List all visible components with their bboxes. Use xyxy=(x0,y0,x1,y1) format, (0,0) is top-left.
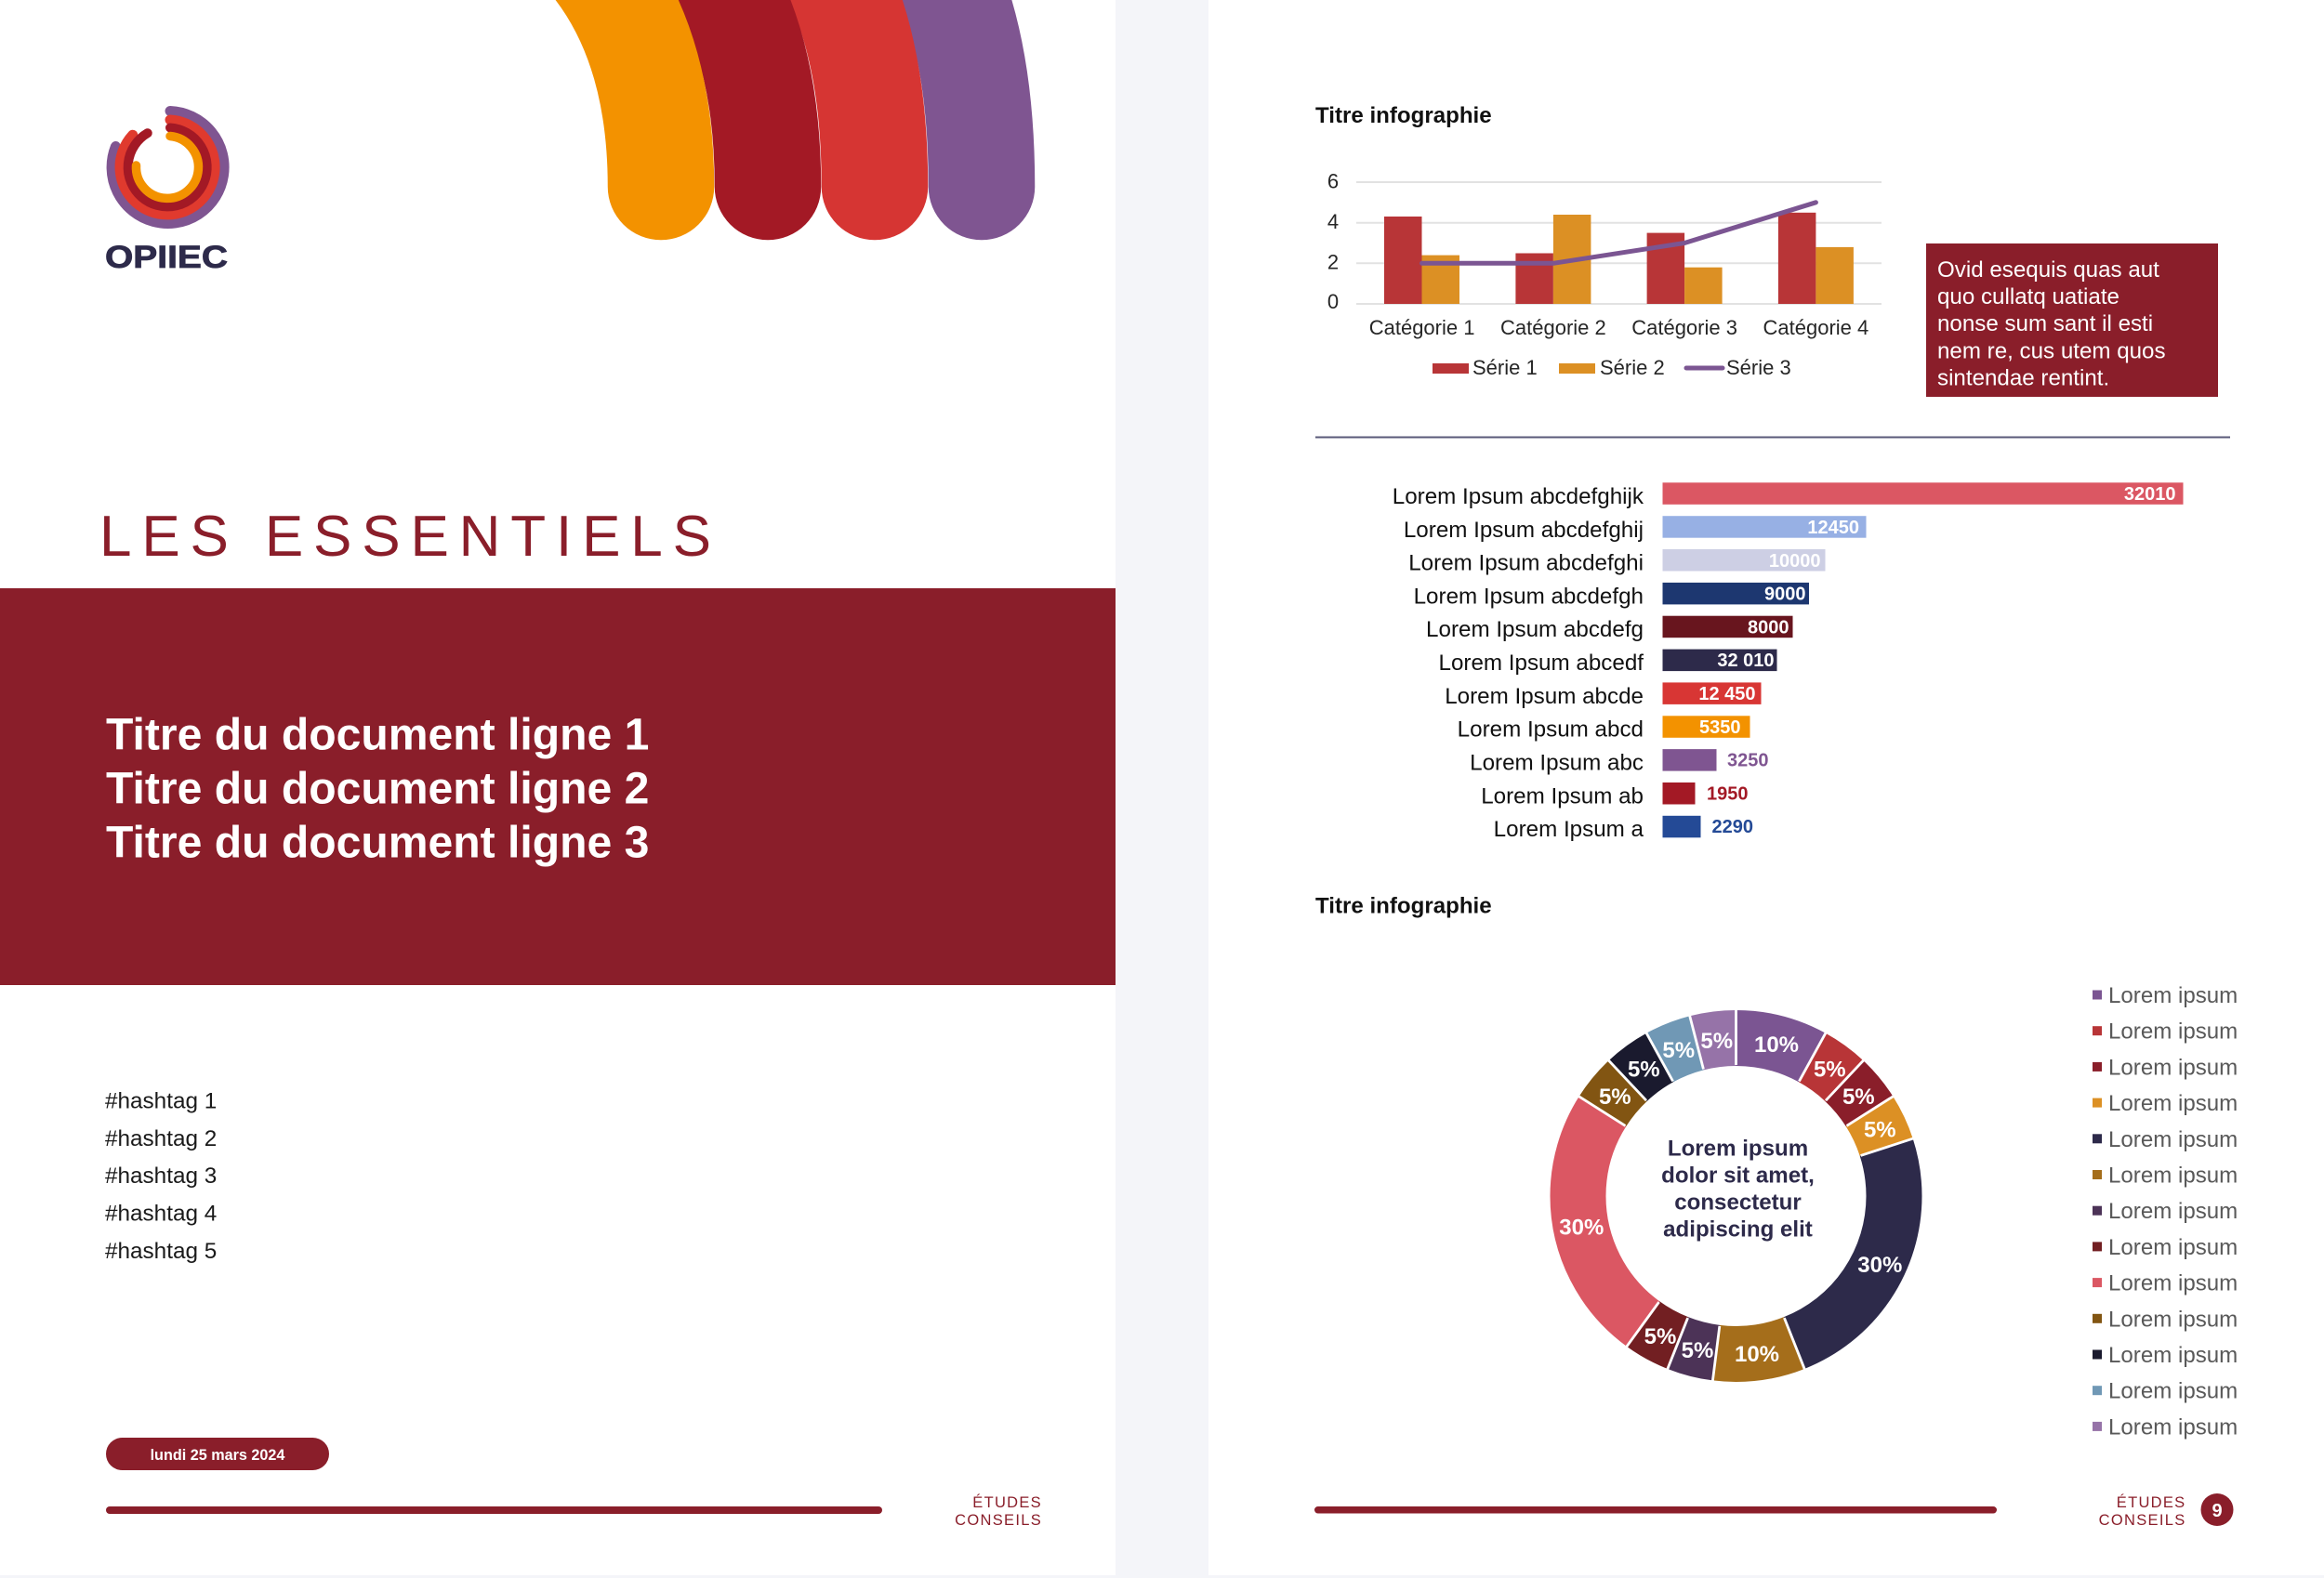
horizontal bar chart: 12 450 xyxy=(1698,684,1755,704)
combo chart: Catégorie 4 xyxy=(1763,316,1868,339)
combo chart: Catégorie 2 xyxy=(1500,316,1606,339)
donut legend: Lorem ipsum xyxy=(2108,1235,2238,1260)
page number badge xyxy=(2201,1493,2233,1526)
right footer label: CONSEILS xyxy=(2099,1512,2186,1529)
donut legend: Lorem ipsum xyxy=(2108,1127,2238,1152)
date pill xyxy=(106,1438,329,1470)
donut chart: 5% xyxy=(1644,1324,1676,1349)
combo chart: Catégorie 1 xyxy=(1369,316,1474,339)
horizontal bar chart: 2290 xyxy=(1712,817,1753,837)
horizontal bar chart: 12450 xyxy=(1807,518,1859,538)
horizontal bar chart: Lorem Ipsum abcdefg xyxy=(1426,617,1644,642)
hashtags list: #hashtag 5 xyxy=(105,1239,217,1264)
right footer rule xyxy=(1314,1506,1997,1513)
donut chart: 10% xyxy=(1735,1342,1779,1367)
donut chart: 5% xyxy=(1662,1038,1695,1063)
donut legend: Lorem ipsum xyxy=(2108,1343,2238,1368)
hashtags list xyxy=(105,1089,217,1264)
donut chart: 5% xyxy=(1599,1085,1631,1110)
horizontal bar chart xyxy=(1393,482,2183,842)
donut legend: Lorem ipsum xyxy=(2108,1019,2238,1045)
right footer label xyxy=(2099,1493,2186,1529)
combo chart: 6 xyxy=(1327,169,1339,193)
horizontal bar chart: 9000 xyxy=(1764,584,1805,604)
horizontal bar chart: Lorem Ipsum abcde xyxy=(1445,684,1644,709)
page number badge: 9 xyxy=(2212,1501,2223,1521)
right footer label: ÉTUDES xyxy=(2117,1493,2186,1511)
callout box: sintendae rentint. xyxy=(1937,366,2109,390)
donut legend: Lorem ipsum xyxy=(2108,1055,2238,1080)
left footer rule xyxy=(106,1506,882,1514)
decorative rainbow arcs xyxy=(594,0,982,187)
donut legend: Lorem ipsum xyxy=(2108,1199,2238,1224)
donut legend: Lorem ipsum xyxy=(2108,1271,2238,1296)
donut legend: Lorem ipsum xyxy=(2108,1414,2238,1440)
donut chart: 5% xyxy=(1864,1117,1896,1143)
hashtags list: #hashtag 3 xyxy=(105,1164,217,1189)
heading: les essentiels: LES ESSENTIELS xyxy=(99,505,711,569)
donut chart: 5% xyxy=(1842,1085,1875,1110)
donut chart: 5% xyxy=(1682,1338,1713,1363)
donut chart: 30% xyxy=(1857,1253,1902,1278)
donut legend: Lorem ipsum xyxy=(2108,983,2238,1008)
horizontal bar chart: Lorem Ipsum abcd xyxy=(1458,717,1644,742)
donut chart xyxy=(1559,1008,1915,1382)
heading: chart 1: Titre infographie xyxy=(1315,103,1492,128)
hashtags list: #hashtag 2 xyxy=(105,1126,217,1151)
donut chart: adipiscing elit xyxy=(1663,1217,1813,1243)
heading: chart 2: Titre infographie xyxy=(1315,894,1492,918)
callout box: quo cullatq uatiate xyxy=(1937,284,2119,309)
logo: OPIIEC: OPIIEC xyxy=(105,240,228,275)
horizontal bar chart: 8000 xyxy=(1748,617,1789,638)
left footer label xyxy=(955,1493,1042,1529)
donut chart: Lorem ipsum xyxy=(1668,1136,1808,1161)
donut legend: Lorem ipsum xyxy=(2108,1164,2238,1188)
horizontal bar chart: Lorem Ipsum abcdefghijk xyxy=(1393,484,1644,509)
callout box xyxy=(1926,243,2218,397)
donut chart: 10% xyxy=(1754,1032,1799,1058)
callout box: nonse sum sant il esti xyxy=(1937,311,2153,336)
combo chart: Série 1 xyxy=(1472,356,1538,379)
donut chart: 30% xyxy=(1559,1216,1604,1240)
donut legend xyxy=(2093,983,2238,1440)
callout box: nem re, cus utem quos xyxy=(1937,338,2166,364)
donut chart: dolor sit amet, xyxy=(1661,1163,1815,1188)
date pill: lundi 25 mars 2024 xyxy=(151,1447,284,1464)
combo chart: Série 3 xyxy=(1726,356,1791,379)
combo chart: Catégorie 3 xyxy=(1631,316,1737,339)
combo chart: 4 xyxy=(1327,210,1339,233)
combo chart: 2 xyxy=(1327,251,1339,273)
hashtags list: #hashtag 1 xyxy=(105,1089,217,1113)
horizontal bar chart: 5350 xyxy=(1699,717,1740,738)
title banner xyxy=(0,588,1116,985)
horizontal bar chart: Lorem Ipsum abc xyxy=(1470,751,1644,775)
title banner: Titre du document ligne 1 xyxy=(106,710,649,760)
donut chart: 5% xyxy=(1814,1058,1846,1082)
callout box: Ovid esequis quas aut xyxy=(1937,257,2159,283)
horizontal bar chart: 32010 xyxy=(2124,484,2175,505)
horizontal bar chart: Lorem Ipsum abcdefghij xyxy=(1404,518,1644,543)
hashtags list: #hashtag 4 xyxy=(105,1201,217,1227)
combo chart xyxy=(1327,169,1882,379)
donut legend: Lorem ipsum xyxy=(2108,1307,2238,1332)
combo chart: Série 2 xyxy=(1600,356,1665,379)
horizontal bar chart: Lorem Ipsum ab xyxy=(1481,784,1644,809)
title banner: Titre du document ligne 3 xyxy=(106,818,649,868)
horizontal bar chart: Lorem Ipsum abcdefghi xyxy=(1408,550,1644,576)
left footer label: CONSEILS xyxy=(955,1512,1042,1529)
title banner: Titre du document ligne 2 xyxy=(106,764,649,814)
horizontal bar chart: Lorem Ipsum abcdefgh xyxy=(1414,584,1644,610)
horizontal bar chart: 3250 xyxy=(1727,751,1768,771)
donut legend: Lorem ipsum xyxy=(2108,1091,2238,1116)
left footer label: ÉTUDES xyxy=(972,1493,1042,1511)
logo: OPIIEC xyxy=(105,112,228,275)
donut chart: consectetur xyxy=(1674,1190,1802,1216)
donut chart: 5% xyxy=(1700,1029,1733,1054)
horizontal bar chart: 32 010 xyxy=(1717,651,1774,671)
combo chart: 0 xyxy=(1327,290,1339,313)
donut legend: Lorem ipsum xyxy=(2108,1379,2238,1404)
horizontal bar chart: 10000 xyxy=(1769,551,1820,572)
horizontal bar chart: 1950 xyxy=(1707,784,1748,805)
horizontal bar chart: Lorem Ipsum a xyxy=(1494,817,1644,842)
horizontal bar chart: Lorem Ipsum abcedf xyxy=(1439,651,1644,676)
donut chart: 5% xyxy=(1628,1058,1660,1082)
